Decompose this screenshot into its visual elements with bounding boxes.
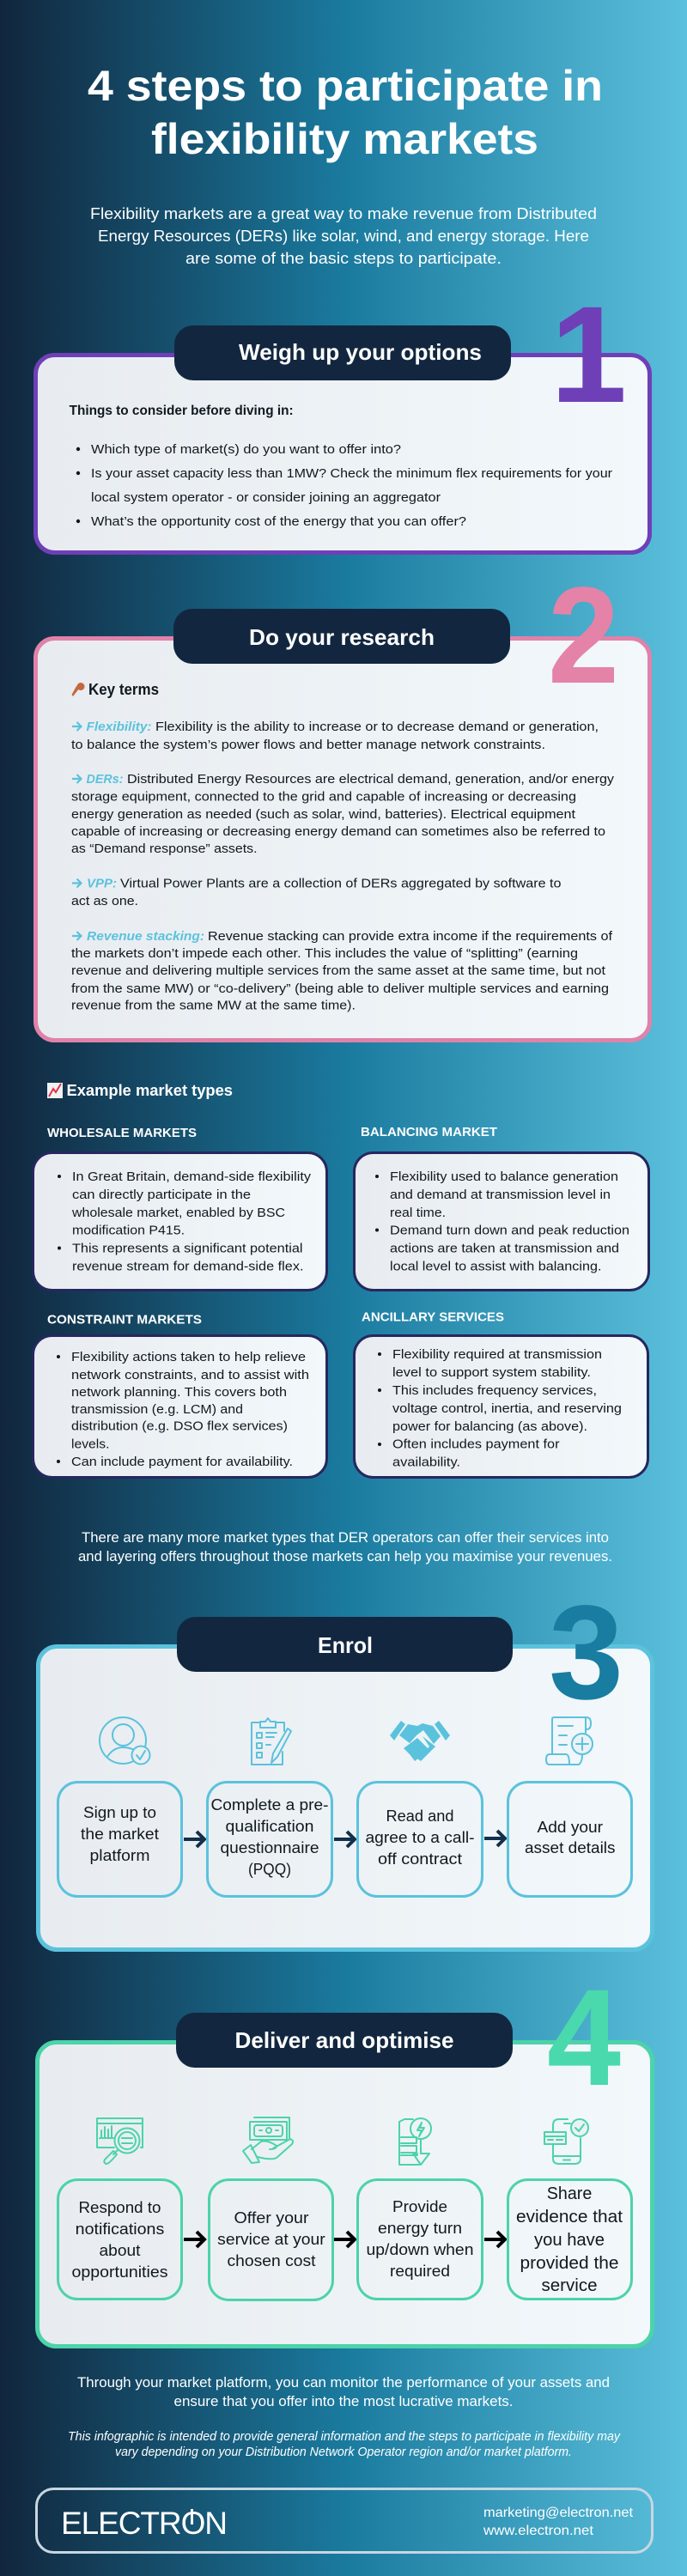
disclaimer	[68, 2430, 621, 2459]
step box: share evidence: provided the	[520, 2254, 618, 2273]
panel: step 4 deliver and optimise	[38, 1960, 653, 2346]
step number 4: 4	[547, 1960, 621, 2114]
step box: provide energy: required	[390, 2263, 450, 2280]
term: revenue stacking: the markets don’t impede each other. This includes the value of “splitting” (earning	[71, 946, 578, 961]
disclaimer: This infographic is intended to provide general information and the steps to participate in flexibility may	[68, 2430, 621, 2444]
panel: step 3 enrol	[38, 1578, 653, 1949]
arrow	[334, 1832, 355, 1847]
title: flexibility markets	[151, 115, 538, 163]
step box: respond	[58, 2179, 182, 2300]
icon: phone with evidence	[544, 2119, 588, 2164]
card	[36, 639, 649, 1041]
panel: constraint markets: Can include payment for availability.	[71, 1455, 293, 1469]
closing text: market platform: ensure that you offer into the most lucrative markets.	[173, 2393, 514, 2409]
footer outline	[36, 2488, 653, 2552]
subheading: Things to consider before diving in:	[70, 404, 294, 418]
term: DERs	[71, 772, 615, 856]
panel: constraint markets: levels.	[71, 1437, 110, 1451]
bullet list: What’s the opportunity cost of the energy that you can offer?	[91, 514, 466, 529]
panel: wholesale markets: revenue stream for demand-side flex.	[72, 1259, 304, 1274]
heading pill: Do your research	[249, 624, 435, 650]
term: DERs: capable of increasing or decreasing energy demand can sometimes also be referred to	[71, 824, 605, 839]
heading: constraint markets: CONSTRAINT MARKETS	[47, 1312, 202, 1327]
panel: constraint markets: network constraints, and to assist with	[71, 1368, 309, 1382]
panel: ancillary services: level to support system stability.	[392, 1365, 591, 1380]
panel: constraint markets	[33, 1336, 326, 1477]
step box: respond: about	[100, 2242, 141, 2259]
panel: ancillary services: Flexibility required at transmission	[392, 1347, 602, 1362]
step box: offer: chosen cost	[227, 2252, 316, 2269]
panel: wholesale markets: can directly participate in the	[72, 1188, 251, 1202]
heading pill	[177, 1617, 513, 1672]
panel: ancillary services: voltage control, inertia, and reserving	[392, 1401, 622, 1416]
card	[38, 2042, 653, 2346]
icon: battery energy down	[399, 2118, 431, 2165]
step box: complete PQQ: (PQQ)	[248, 1861, 291, 1878]
panel: ancillary services: Often includes payment for	[392, 1437, 560, 1451]
panel: wholesale markets: wholesale market, enabled by BSC	[71, 1206, 285, 1220]
step box: sign up: the market	[81, 1826, 159, 1843]
term: flexibility	[71, 720, 599, 752]
term: revenue stacking: Revenue stacking can provide extra income if the requirements of	[208, 929, 613, 944]
step box: sign up	[58, 1783, 182, 1896]
panel: ancillary services	[354, 1336, 647, 1477]
panel: constraint markets: distribution (e.g. DSO flex services)	[71, 1419, 288, 1434]
icon: scroll with plus	[546, 1717, 593, 1765]
closing text: market types: There are many more market types that DER operators can offer their services into	[82, 1529, 609, 1546]
footer	[36, 2488, 653, 2552]
step box: offer	[210, 2179, 333, 2300]
term: VPP	[71, 876, 562, 908]
term: VPP: act as one.	[71, 894, 138, 908]
card	[38, 1647, 653, 1949]
heading pill	[173, 609, 510, 664]
step box: add asset details: asset details	[525, 1839, 615, 1856]
closing text: market platform	[77, 2374, 610, 2409]
step box: respond: notifications	[76, 2221, 164, 2238]
term: DERs: Distributed Energy Resources are electrical demand, generation, and/or energy	[127, 772, 615, 787]
panel: balancing market: and demand at transmission level in	[390, 1188, 611, 1202]
disclaimer: vary depending on your Distribution Network Operator region and/or market platform.	[115, 2445, 572, 2459]
heading pill	[176, 2013, 513, 2068]
step box: read and agree	[357, 1783, 483, 1896]
step box: provide energy: up/down when	[366, 2241, 474, 2258]
panel: balancing market: Flexibility used to balance generation	[390, 1170, 618, 1184]
contact details: marketing@electron.net	[483, 2506, 634, 2520]
intro text: Energy Resources (DERs) like solar, wind, and energy storage. Here	[98, 228, 589, 245]
arrow	[484, 2232, 505, 2247]
panel: balancing market: real time.	[390, 1206, 446, 1220]
arrow	[334, 2232, 355, 2247]
step box: sign up: Sign up to	[83, 1804, 156, 1821]
step box: complete PQQ	[208, 1783, 331, 1896]
panel: step 2 do your research	[36, 558, 649, 1041]
step box: add asset details	[508, 1783, 632, 1896]
heading: wholesale markets: WHOLESALE MARKETS	[47, 1126, 197, 1140]
step box: provide energy: energy turn	[378, 2220, 462, 2237]
card	[36, 355, 649, 553]
step number 2: 2	[548, 558, 619, 712]
step box: provide energy: Provide	[392, 2198, 447, 2215]
arrow	[184, 2232, 204, 2247]
step box: complete PQQ: qualification	[225, 1818, 314, 1835]
step box: respond: Respond to	[79, 2199, 161, 2216]
step box: share evidence: Share	[547, 2184, 592, 2203]
term: DERs: DERs:	[86, 772, 124, 787]
panel: balancing market: local level to assist with balancing.	[390, 1259, 601, 1274]
step box: share evidence: you have	[534, 2231, 605, 2250]
heading pill: Enrol	[318, 1632, 373, 1658]
term: DERs: storage equipment, connected to the grid and capable of increasing or decreasing	[71, 790, 576, 804]
closing text: market platform: Through your market platform, you can monitor the performance of your assets and	[77, 2374, 610, 2391]
term: flexibility: Flexibility is the ability to increase or to decrease demand or generation,	[155, 720, 599, 734]
closing text: market types: and layering offers throughout those markets can help you maximise your revenues.	[78, 1548, 612, 1564]
step box: share evidence: service	[541, 2276, 598, 2295]
step box: read and agree: Read and	[386, 1807, 453, 1825]
panel: balancing market	[354, 1152, 649, 1290]
icon: person with check	[100, 1717, 149, 1764]
key terms heading: Key terms	[88, 681, 159, 698]
icon: handshake	[390, 1721, 450, 1761]
intro text: are some of the basic steps to participate.	[185, 250, 502, 267]
closing text: market types	[78, 1529, 612, 1564]
panel: ancillary services: This includes frequency services,	[392, 1383, 597, 1398]
step box: add asset details: Add your	[538, 1819, 603, 1836]
panel: balancing market: Demand turn down and peak reduction	[390, 1223, 629, 1238]
panel: step 1 weigh up your options	[36, 277, 649, 553]
term: revenue stacking: Revenue stacking:	[87, 929, 204, 944]
panel: ancillary services: availability.	[392, 1455, 460, 1470]
panel: wholesale markets: In Great Britain, demand-side flexibility	[72, 1170, 312, 1184]
step number 3: 3	[549, 1578, 623, 1728]
title: 4 steps to participate in	[88, 62, 603, 110]
icon: clipboard checklist	[252, 1718, 291, 1765]
arrow	[184, 1832, 204, 1847]
panel: ancillary services: power for balancing (as above).	[392, 1419, 587, 1434]
logo: Electron: ELECTRON	[61, 2506, 228, 2541]
term: revenue stacking: from the same MW) or “co-delivery” (being able to deliver multiple services and earning	[71, 981, 609, 996]
step number 1: 1	[550, 277, 627, 431]
bullet list: Which type of market(s) do you want to offer into?	[91, 442, 401, 457]
icon: dashboard magnifier	[97, 2118, 143, 2164]
term: revenue stacking: revenue and delivering multiple services from the same asset at the same time, but not	[71, 963, 606, 978]
term: flexibility: to balance the system’s power flows and better manage network constraints.	[71, 738, 545, 752]
arrow	[484, 1831, 505, 1846]
heading pill: Weigh up your options	[239, 339, 482, 365]
term: DERs: as “Demand response” assets.	[71, 841, 258, 856]
bullet list: Is your asset capacity less than 1MW? Check the minimum flex requirements for your	[91, 466, 612, 481]
panel: constraint markets: network planning. This covers both	[71, 1385, 287, 1400]
term: VPP: Virtual Power Plants are a collection of DERs aggregated by software to	[120, 876, 562, 891]
heading pill: Deliver and optimise	[235, 2027, 453, 2053]
step box: respond: opportunities	[72, 2263, 168, 2281]
step box: provide energy	[357, 2179, 483, 2300]
step box: offer: Offer your	[234, 2209, 309, 2227]
panel: constraint markets: Flexibility actions taken to help relieve	[71, 1350, 306, 1364]
panel: wholesale markets: This represents a significant potential	[72, 1242, 302, 1255]
section heading: Example market types	[67, 1082, 233, 1099]
term: DERs: energy generation as needed (such as solar, wind, batteries). Electrical equipment	[71, 807, 576, 822]
contact details: www.electron.net	[483, 2524, 594, 2538]
term: revenue stacking	[71, 929, 613, 1013]
title	[88, 62, 603, 163]
contact details	[483, 2506, 634, 2538]
panel: balancing market: actions are taken at transmission and	[390, 1242, 619, 1255]
panel: constraint markets: transmission (e.g. LCM) and	[71, 1402, 243, 1417]
term: VPP: VPP:	[87, 876, 117, 891]
step box: share evidence: evidence that	[516, 2208, 623, 2227]
step box: share evidence	[508, 2179, 632, 2300]
panel: wholesale markets	[33, 1152, 326, 1290]
icon: money in hand	[243, 2117, 293, 2163]
intro text	[90, 205, 597, 267]
step box: read and agree: agree to a call-	[366, 1829, 474, 1846]
step box: complete PQQ: Complete a pre-	[211, 1796, 329, 1814]
icon: key	[72, 683, 84, 696]
term: revenue stacking: revenue from the same MW at the same time).	[71, 998, 356, 1013]
bullet list: local system operator - or consider joining an aggregator	[91, 490, 441, 505]
intro text: Flexibility markets are a great way to make revenue from Distributed	[90, 205, 597, 222]
step box: offer: service at your	[217, 2231, 325, 2248]
bullet list	[76, 442, 612, 529]
heading: balancing market: BALANCING MARKET	[361, 1125, 497, 1139]
heading: ancillary services: ANCILLARY SERVICES	[362, 1310, 504, 1324]
panel: wholesale markets: modification P415.	[72, 1223, 185, 1238]
section: example market types	[33, 1082, 649, 1477]
heading pill	[174, 325, 511, 380]
step box: read and agree: off contract	[378, 1850, 462, 1868]
step box: complete PQQ: questionnaire	[220, 1839, 319, 1856]
step box: sign up: platform	[89, 1847, 149, 1864]
icon: chart	[47, 1083, 63, 1098]
term: flexibility: Flexibility:	[86, 720, 151, 734]
